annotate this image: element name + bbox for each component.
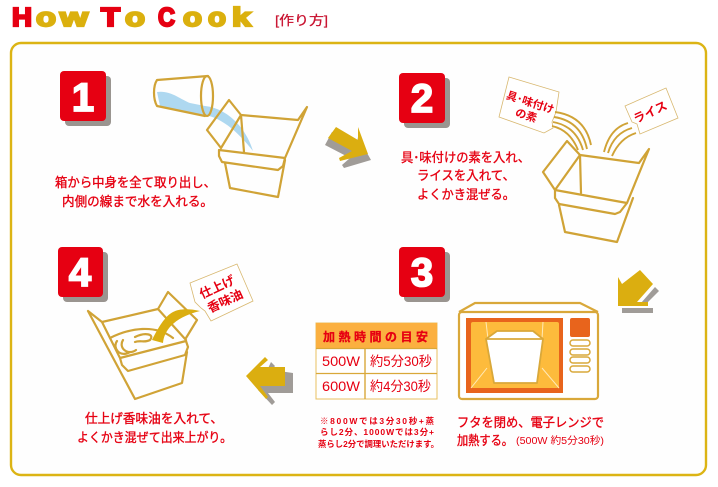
icon: rice packet — [625, 88, 678, 134]
footnote: 蒸らし2分で調理いただけます。 — [318, 439, 439, 449]
title: How To Cook — [12, 2, 252, 32]
step 4 panel — [58, 247, 253, 445]
icon: oil swoosh — [152, 309, 200, 343]
badge 2: 2 — [411, 77, 433, 121]
icon: seasoning packet: 具･味付け — [505, 88, 556, 117]
icon: open box — [543, 141, 649, 242]
footnote — [318, 416, 439, 449]
heating time table: 約5分30秒 — [370, 354, 432, 369]
arrow: step 2 to 3 — [618, 270, 659, 313]
title: How To Cook: H — [12, 2, 32, 32]
icon: finishing oil packet: 香味油 — [205, 286, 245, 316]
icon: seasoning packet: の素 — [514, 105, 539, 125]
icon: seasoning packet — [499, 77, 559, 133]
instruction text 2: 具･味付けの素を入れ、 — [401, 150, 530, 165]
footnote: ※800Wでは3分30秒+蒸 — [320, 416, 434, 426]
icon: box with noodles — [88, 292, 197, 399]
icon: motion arcs — [552, 112, 636, 156]
title: How To Cook: C — [158, 2, 175, 32]
instruction text 3: フタを閉め、電子レンジで — [457, 415, 604, 430]
arrow: step 1 to 2 — [325, 127, 371, 168]
title: How To Cook: o — [183, 2, 202, 32]
icon: microwave — [459, 303, 598, 399]
instruction text 3: (500W 約5分30秒) — [516, 434, 604, 447]
footnote: らし2分、1000Wでは3分+ — [320, 427, 434, 437]
instruction text 1 — [55, 175, 216, 209]
badge 1: 1 — [72, 76, 94, 120]
title: How To Cook: w — [59, 2, 89, 32]
title: How To Cook: o — [36, 2, 56, 32]
icon: finishing oil packet — [190, 264, 253, 321]
badge 4 — [58, 247, 108, 302]
title: How To Cook: k — [232, 2, 252, 32]
badge 3 — [399, 247, 450, 302]
instruction text 4: よくかき混ぜて出来上がり。 — [77, 430, 232, 445]
title: How To Cook: T — [101, 2, 120, 32]
title: How To Cook: o — [208, 2, 226, 32]
step 3 panel — [316, 247, 604, 449]
instruction text 2: よくかき混ぜる。 — [417, 187, 515, 202]
instruction text 1: 箱から中身を全て取り出し、 — [55, 175, 216, 190]
badge 4: 4 — [69, 251, 92, 295]
heating time table: 600W — [322, 378, 361, 394]
heating time table: 500W — [322, 353, 361, 369]
step 1 panel — [55, 71, 307, 209]
instruction text 1: 内側の線まで水を入れる。 — [62, 194, 213, 209]
badge 2 — [399, 73, 450, 128]
icon: finishing oil packet: 仕上げ — [197, 272, 238, 302]
subtitle: how to make: [作り方] — [275, 13, 328, 28]
badge 3: 3 — [411, 251, 433, 295]
badge 1 — [60, 71, 111, 126]
title: How To Cook: o — [125, 2, 145, 32]
arrow: step 3 to 4 — [246, 357, 293, 405]
icon: pouring water from cup — [154, 76, 307, 197]
heating time table — [316, 323, 437, 399]
instruction text 2 — [401, 150, 530, 202]
instruction text 4: 仕上げ香味油を入れて、 — [85, 411, 223, 426]
heating time table: 加熱時間の目安 — [323, 329, 428, 344]
icon: rice packet: ライス — [631, 98, 669, 126]
instruction text 3 — [457, 415, 604, 448]
instruction text 4 — [77, 411, 232, 445]
step 2 panel — [399, 73, 678, 242]
heating time table: 約4分30秒 — [370, 379, 431, 394]
instruction text 3: 加熱する。 — [457, 433, 513, 448]
instruction text 2: ライスを入れて、 — [417, 168, 515, 183]
